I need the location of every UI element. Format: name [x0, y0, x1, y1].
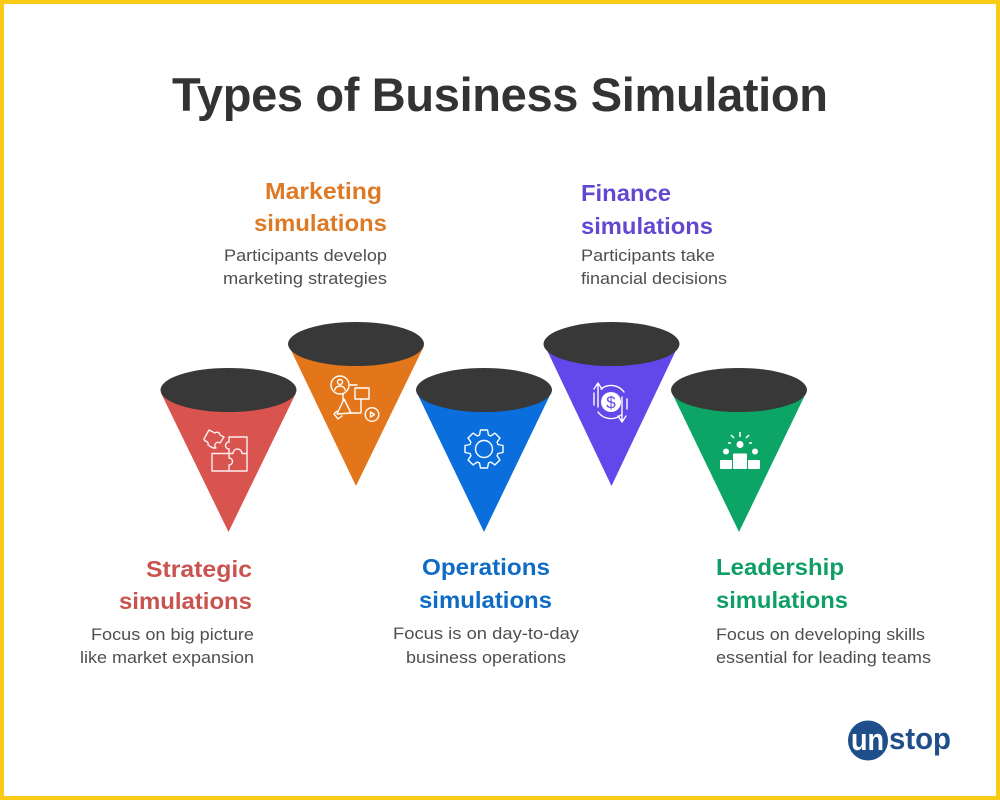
text block: strategic simulations: Focus on big picture — [91, 625, 254, 644]
text block: marketing simulations — [223, 178, 387, 288]
icon: dollar exchange: $ — [606, 393, 616, 412]
text block: finance simulations: simulations — [581, 213, 713, 239]
panel: finance simulations cone — [544, 322, 680, 486]
panel: leadership simulations cone — [671, 368, 807, 532]
text block: marketing simulations: Marketing — [265, 178, 382, 204]
text block: operations simulations: business operations — [406, 648, 566, 667]
text block: finance simulations: Participants take — [581, 246, 715, 265]
panel: marketing simulations cone — [288, 322, 424, 486]
text block: leadership simulations: essential for leading teams — [716, 648, 931, 667]
title: Types of Business Simulation — [172, 68, 828, 121]
icon: podium — [720, 432, 760, 469]
icon: gear — [465, 430, 503, 468]
text block: finance simulations — [581, 180, 727, 288]
text block: finance simulations: financial decisions — [581, 269, 727, 288]
text block: finance simulations: Finance — [581, 180, 671, 206]
text block: operations simulations: Focus is on day-to-day — [393, 624, 580, 643]
panel: strategic simulations cone — [160, 368, 296, 532]
logo: unstop — [848, 720, 951, 760]
icon: marketing megaphone — [331, 376, 379, 421]
text block: operations simulations: Operations — [422, 554, 550, 580]
text block: strategic simulations — [80, 556, 254, 667]
text block: marketing simulations: Participants develop — [224, 246, 387, 265]
text block: operations simulations — [393, 554, 580, 667]
text block: leadership simulations: simulations — [716, 587, 848, 613]
icon: puzzle — [204, 430, 247, 471]
logo: unstop: stop — [889, 721, 951, 756]
panel: operations simulations cone — [416, 368, 552, 532]
icon: dollar exchange — [594, 383, 627, 422]
text block: strategic simulations: simulations — [119, 588, 252, 614]
text block: strategic simulations: Strategic — [146, 556, 252, 582]
text block: marketing simulations: marketing strategies — [223, 269, 387, 288]
text block: leadership simulations: Leadership — [716, 554, 844, 580]
text block: leadership simulations: Focus on developing skills — [716, 625, 925, 644]
text block: leadership simulations — [716, 554, 931, 667]
text block: operations simulations: simulations — [419, 587, 552, 613]
text block: strategic simulations: like market expansion — [80, 648, 254, 667]
text block: marketing simulations: simulations — [254, 210, 387, 236]
logo: unstop: un — [851, 722, 884, 757]
